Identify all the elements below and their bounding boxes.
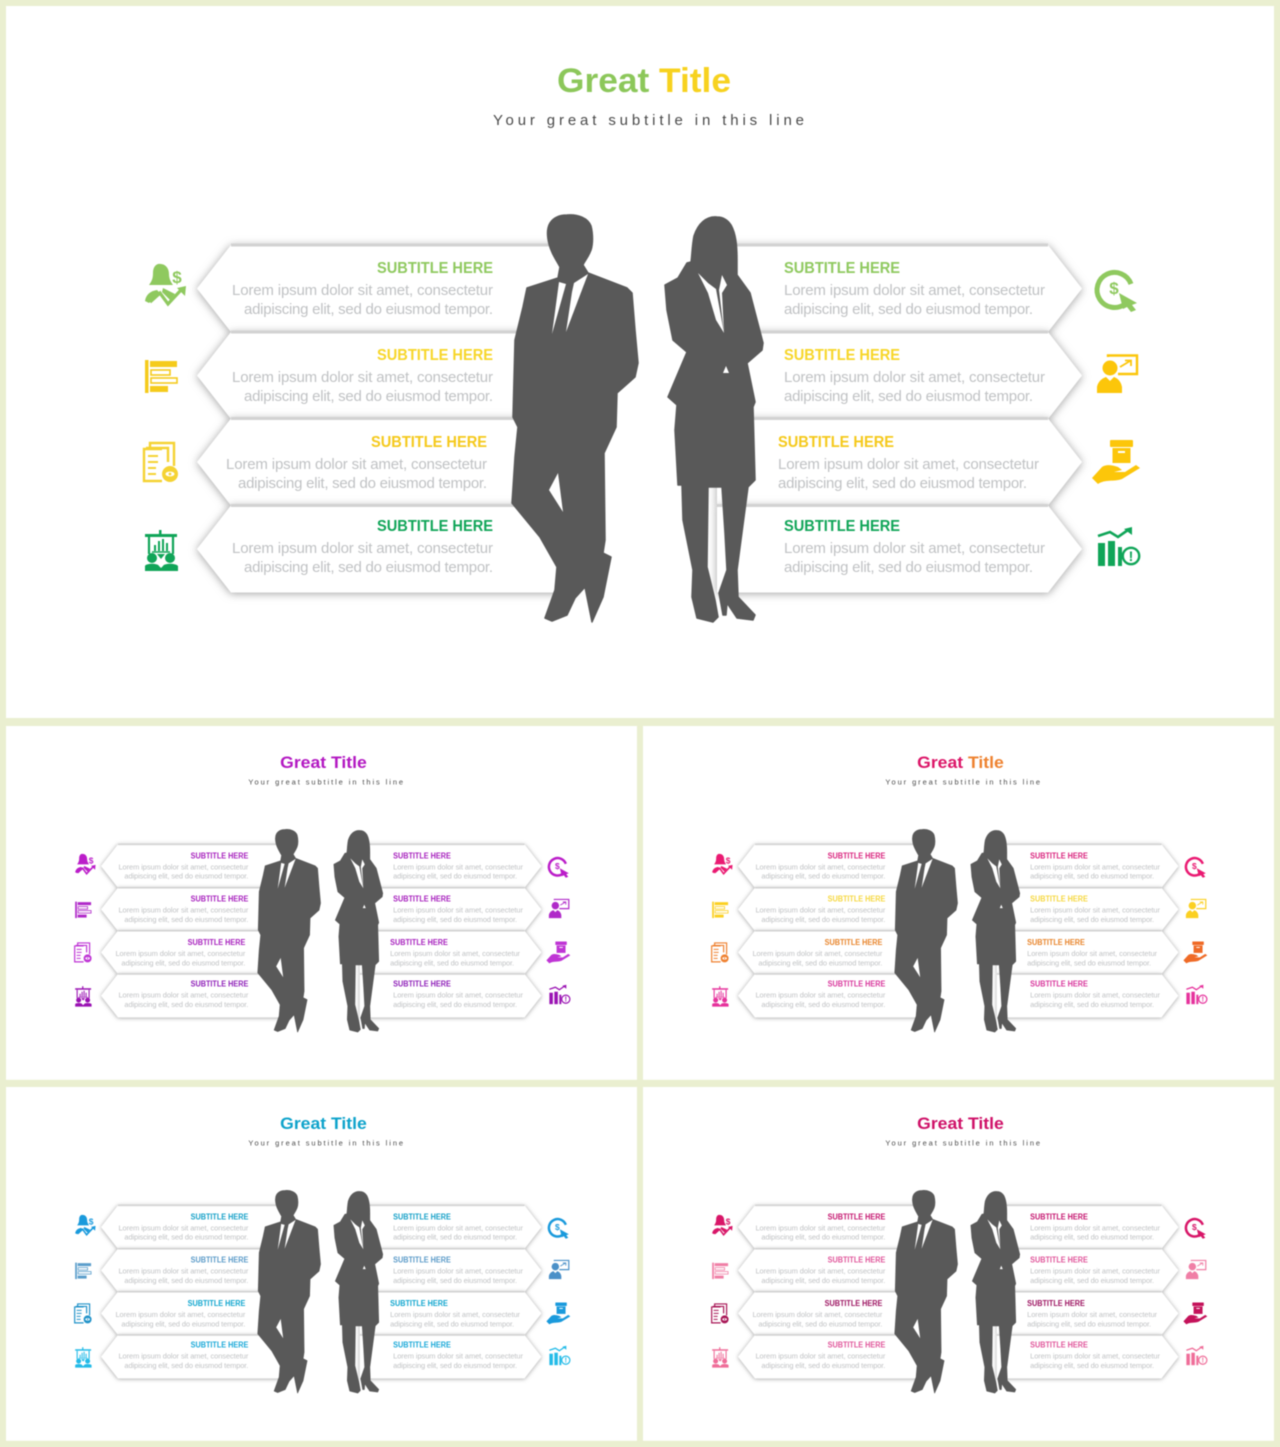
panel: left row 2: adipiscing elit, sed do eiusmod tempor.	[761, 1276, 885, 1285]
panel: right row 1: adipiscing elit, sed do eiusmod tempor.	[393, 872, 517, 881]
panel: left row 2: SUBTITLE HERE	[828, 895, 885, 904]
panel: right row 4: Lorem ipsum dolor sit amet, consectetur	[393, 1352, 524, 1361]
icon: person with rising chart	[75, 854, 96, 874]
panel: left row 4	[101, 974, 289, 1017]
panel: left row 3: SUBTITLE HERE	[371, 434, 487, 451]
panel: left row 1: Lorem ipsum dolor sit amet, consectetur	[118, 1223, 249, 1232]
icon: bars with alert: !	[565, 997, 567, 1004]
panel: left row 4	[101, 1335, 289, 1378]
panel: left row 1: SUBTITLE HERE	[191, 1212, 248, 1221]
title: Great Title	[917, 1114, 1004, 1133]
panel: right row 4	[997, 1335, 1178, 1378]
slide background	[643, 1087, 1274, 1441]
icon: presenter	[1186, 899, 1206, 918]
slide background	[643, 726, 1274, 1080]
panel: right row 1: adipiscing elit, sed do eiusmod tempor.	[784, 301, 1033, 318]
panel: right row 3: SUBTITLE HERE	[390, 1299, 448, 1308]
panel: right row 3	[717, 418, 1082, 506]
icon: dollar click: $	[555, 1222, 560, 1232]
icon: dollar click	[549, 858, 569, 878]
panel: right row 3: Lorem ipsum dolor sit amet, consectetur	[778, 456, 1039, 473]
icon: hand with box	[546, 941, 570, 963]
panel: right row 2	[360, 888, 541, 931]
panel: right row 1: SUBTITLE HERE	[393, 1212, 451, 1221]
icon: person with rising chart: $	[89, 855, 94, 865]
icon: bars with alert: !	[1129, 548, 1133, 564]
panel: right row 3: Lorem ipsum dolor sit amet, consectetur	[1027, 949, 1158, 958]
panel: right row 2: adipiscing elit, sed do eiusmod tempor.	[784, 388, 1033, 405]
panel: left row 4: SUBTITLE HERE	[828, 1341, 885, 1350]
panel: right row 4	[717, 506, 1082, 592]
panel: right row 3: adipiscing elit, sed do eiusmod tempor.	[1027, 1319, 1151, 1328]
panel: right row 1	[717, 245, 1082, 332]
panel: right row 3: adipiscing elit, sed do eiusmod tempor.	[778, 475, 1027, 492]
woman silhouette	[971, 1191, 1020, 1393]
panel: right row 1	[997, 844, 1178, 888]
icon: bar list	[75, 1263, 91, 1279]
icon: document with eye	[712, 943, 729, 962]
panel: right row 3: SUBTITLE HERE	[1027, 938, 1085, 947]
panel: right row 1: SUBTITLE HERE	[784, 260, 900, 277]
panel: right row 2: Lorem ipsum dolor sit amet, consectetur	[1030, 906, 1161, 915]
panel: left row 1: adipiscing elit, sed do eiusmod tempor.	[124, 1233, 248, 1242]
panel: left row 1: Lorem ipsum dolor sit amet, consectetur	[232, 282, 493, 299]
panel: right row 4: Lorem ipsum dolor sit amet, consectetur	[393, 991, 524, 1000]
slide background	[6, 6, 1274, 718]
icon: person with rising chart	[145, 264, 186, 304]
icon: person with rising chart: $	[726, 855, 731, 865]
icon: bars with alert: !	[1202, 997, 1204, 1004]
icon: bars with alert	[1098, 527, 1139, 566]
panel: left row 1: SUBTITLE HERE	[191, 851, 248, 860]
panel: right row 2: Lorem ipsum dolor sit amet, consectetur	[784, 369, 1045, 386]
icon: presentation board	[712, 1347, 729, 1368]
panel: right row 3: SUBTITLE HERE	[390, 938, 448, 947]
panel: right row 2: SUBTITLE HERE	[393, 1256, 451, 1265]
icon: document with eye	[712, 1304, 729, 1323]
panel: right row 1: SUBTITLE HERE	[1030, 851, 1088, 860]
icon: bars with alert	[1186, 985, 1207, 1004]
panel: right row 3: adipiscing elit, sed do eiusmod tempor.	[390, 958, 514, 967]
panel: right row 2	[717, 332, 1082, 419]
panel: left row 4: SUBTITLE HERE	[377, 518, 493, 535]
icon: person with rising chart	[712, 1215, 733, 1235]
panel: left row 2: adipiscing elit, sed do eiusmod tempor.	[761, 915, 885, 924]
panel: left row 2: Lorem ipsum dolor sit amet, consectetur	[232, 369, 493, 386]
woman silhouette	[665, 217, 763, 622]
icon: presenter	[1186, 1260, 1206, 1279]
panel: left row 3: Lorem ipsum dolor sit amet, consectetur	[115, 1310, 246, 1319]
panel: right row 2	[360, 1249, 541, 1292]
panel: right row 1: SUBTITLE HERE	[393, 851, 451, 860]
man silhouette	[258, 829, 320, 1032]
icon: bars with alert	[1186, 1346, 1207, 1365]
panel: left row 2	[101, 888, 289, 931]
title: Great Title	[280, 753, 367, 772]
icon: hand with box	[1092, 440, 1140, 484]
panel: left row 3	[101, 1292, 289, 1335]
icon: presentation board	[145, 530, 178, 571]
icon: dollar click	[1186, 1219, 1206, 1239]
panel: left row 2: Lorem ipsum dolor sit amet, consectetur	[118, 1267, 249, 1276]
icon: bars with alert: !	[565, 1358, 567, 1365]
panel: right row 4: SUBTITLE HERE	[393, 1341, 451, 1350]
panel: right row 4	[360, 1335, 541, 1378]
panel: right row 1	[360, 844, 541, 888]
panel: right row 2	[997, 888, 1178, 931]
panel: left row 3: Lorem ipsum dolor sit amet, consectetur	[226, 456, 487, 473]
panel: left row 1: Lorem ipsum dolor sit amet, consectetur	[755, 862, 886, 871]
panel: left row 4: Lorem ipsum dolor sit amet, consectetur	[755, 1352, 886, 1361]
panel: right row 2: adipiscing elit, sed do eiusmod tempor.	[1030, 1276, 1154, 1285]
title: Great Title	[917, 753, 1004, 772]
icon: dollar click: $	[1192, 861, 1197, 871]
icon: hand with box	[546, 1302, 570, 1324]
panel: left row 3: adipiscing elit, sed do eiusmod tempor.	[121, 958, 245, 967]
man silhouette	[512, 215, 638, 622]
subtitle: Your great subtitle in this line	[248, 1139, 403, 1148]
panel: right row 3: adipiscing elit, sed do eiusmod tempor.	[390, 1319, 514, 1328]
slide: magenta variant	[643, 1087, 1274, 1441]
panel: right row 3: Lorem ipsum dolor sit amet, consectetur	[390, 1310, 521, 1319]
title: Great Title	[280, 1114, 367, 1133]
panel: right row 3	[997, 1292, 1178, 1335]
panel: right row 4: SUBTITLE HERE	[393, 980, 451, 989]
icon: presentation board	[75, 986, 92, 1007]
icon: bar list	[75, 902, 91, 918]
icon: dollar click	[1186, 858, 1206, 878]
icon: dollar click: $	[555, 861, 560, 871]
man silhouette	[895, 829, 957, 1032]
woman silhouette	[334, 830, 383, 1032]
panel: right row 3: Lorem ipsum dolor sit amet, consectetur	[1027, 1310, 1158, 1319]
panel: right row 1: Lorem ipsum dolor sit amet, consectetur	[393, 862, 524, 871]
icon: presenter	[549, 1260, 569, 1279]
icon: person with rising chart: $	[172, 268, 182, 287]
icon: hand with box	[1183, 1302, 1207, 1324]
panel: left row 4: Lorem ipsum dolor sit amet, consectetur	[118, 1352, 249, 1361]
slide background	[6, 1087, 637, 1441]
icon: dollar click	[549, 1219, 569, 1239]
icon: presenter	[1097, 356, 1137, 393]
icon: document with eye	[75, 943, 92, 962]
panel: left row 2: SUBTITLE HERE	[377, 347, 493, 364]
man silhouette	[258, 1190, 320, 1393]
panel: left row 1	[197, 245, 575, 332]
subtitle: Your great subtitle in this line	[885, 1139, 1040, 1148]
panel: left row 3: adipiscing elit, sed do eiusmod tempor.	[758, 958, 882, 967]
panel: left row 1: Lorem ipsum dolor sit amet, consectetur	[118, 862, 249, 871]
panel: right row 2: adipiscing elit, sed do eiusmod tempor.	[393, 1276, 517, 1285]
panel: right row 3	[997, 931, 1178, 974]
panel: right row 1: Lorem ipsum dolor sit amet, consectetur	[393, 1223, 524, 1232]
panel: right row 4: adipiscing elit, sed do eiusmod tempor.	[784, 559, 1033, 576]
panel: left row 3: Lorem ipsum dolor sit amet, consectetur	[115, 949, 246, 958]
panel: left row 4	[197, 506, 575, 592]
icon: document with eye	[75, 1304, 92, 1323]
panel: right row 1: Lorem ipsum dolor sit amet, consectetur	[1030, 862, 1161, 871]
icon: person with rising chart: $	[726, 1216, 731, 1226]
panel: left row 2: SUBTITLE HERE	[191, 895, 248, 904]
woman silhouette	[971, 830, 1020, 1032]
panel: right row 1	[997, 1205, 1178, 1249]
panel: right row 4: SUBTITLE HERE	[1030, 1341, 1088, 1350]
panel: right row 2: SUBTITLE HERE	[784, 347, 900, 364]
subtitle: Your great subtitle in this line	[493, 112, 804, 129]
panel: right row 2: adipiscing elit, sed do eiusmod tempor.	[1030, 915, 1154, 924]
panel: left row 4: adipiscing elit, sed do eiusmod tempor.	[244, 559, 493, 576]
panel: left row 1	[738, 844, 926, 888]
panel: left row 4	[738, 974, 926, 1017]
panel: right row 4	[360, 974, 541, 1017]
panel: right row 2: adipiscing elit, sed do eiusmod tempor.	[393, 915, 517, 924]
panel: right row 4: adipiscing elit, sed do eiusmod tempor.	[1030, 1361, 1154, 1370]
panel: left row 2: Lorem ipsum dolor sit amet, consectetur	[755, 906, 886, 915]
panel: left row 2	[101, 1249, 289, 1292]
icon: dollar click: $	[1109, 279, 1119, 298]
panel: right row 4: SUBTITLE HERE	[1030, 980, 1088, 989]
panel: right row 4: adipiscing elit, sed do eiusmod tempor.	[393, 1361, 517, 1370]
panel: left row 3: adipiscing elit, sed do eiusmod tempor.	[121, 1319, 245, 1328]
title: Great Title	[557, 62, 731, 100]
panel: right row 1	[360, 1205, 541, 1249]
panel: left row 1	[101, 844, 289, 888]
icon: bars with alert	[549, 985, 570, 1004]
panel: left row 1	[738, 1205, 926, 1249]
panel: left row 2: SUBTITLE HERE	[191, 1256, 248, 1265]
icon: bar list	[712, 1263, 728, 1279]
panel: right row 1: adipiscing elit, sed do eiusmod tempor.	[393, 1233, 517, 1242]
panel: left row 3: SUBTITLE HERE	[825, 1299, 882, 1308]
panel: right row 1: adipiscing elit, sed do eiusmod tempor.	[1030, 872, 1154, 881]
panel: left row 4: Lorem ipsum dolor sit amet, consectetur	[755, 991, 886, 1000]
icon: bars with alert: !	[1202, 1358, 1204, 1365]
panel: right row 3: adipiscing elit, sed do eiusmod tempor.	[1027, 958, 1151, 967]
panel: left row 4: SUBTITLE HERE	[828, 980, 885, 989]
panel: left row 2: adipiscing elit, sed do eiusmod tempor.	[244, 388, 493, 405]
slide: main green and yellow	[6, 6, 1274, 718]
panel: right row 4: SUBTITLE HERE	[784, 518, 900, 535]
icon: person with rising chart	[75, 1215, 96, 1235]
panel: left row 3: SUBTITLE HERE	[188, 1299, 245, 1308]
panel: left row 2	[738, 888, 926, 931]
panel: left row 2: Lorem ipsum dolor sit amet, consectetur	[118, 906, 249, 915]
panel: left row 4: Lorem ipsum dolor sit amet, consectetur	[118, 991, 249, 1000]
panel: left row 1: adipiscing elit, sed do eiusmod tempor.	[124, 872, 248, 881]
panel: right row 2: SUBTITLE HERE	[1030, 1256, 1088, 1265]
panel: left row 3: Lorem ipsum dolor sit amet, consectetur	[752, 1310, 883, 1319]
panel: right row 2	[997, 1249, 1178, 1292]
panel: right row 3: SUBTITLE HERE	[1027, 1299, 1085, 1308]
panel: left row 3	[197, 418, 575, 506]
icon: bar list	[712, 902, 728, 918]
panel: left row 3: adipiscing elit, sed do eiusmod tempor.	[758, 1319, 882, 1328]
slide: pink and orange variant	[643, 726, 1274, 1080]
panel: right row 1: Lorem ipsum dolor sit amet, consectetur	[784, 282, 1045, 299]
panel: left row 2	[738, 1249, 926, 1292]
icon: bars with alert	[549, 1346, 570, 1365]
panel: right row 4: adipiscing elit, sed do eiusmod tempor.	[1030, 1000, 1154, 1009]
panel: left row 1: SUBTITLE HERE	[377, 260, 493, 277]
panel: left row 3	[101, 931, 289, 974]
panel: left row 1	[101, 1205, 289, 1249]
panel: right row 4: adipiscing elit, sed do eiusmod tempor.	[393, 1000, 517, 1009]
panel: right row 2: Lorem ipsum dolor sit amet, consectetur	[393, 1267, 524, 1276]
icon: person with rising chart	[712, 854, 733, 874]
panel: right row 1: Lorem ipsum dolor sit amet, consectetur	[1030, 1223, 1161, 1232]
panel: left row 4: SUBTITLE HERE	[191, 1341, 248, 1350]
panel: right row 2: Lorem ipsum dolor sit amet, consectetur	[1030, 1267, 1161, 1276]
panel: right row 4: Lorem ipsum dolor sit amet, consectetur	[1030, 1352, 1161, 1361]
subtitle: Your great subtitle in this line	[248, 778, 403, 787]
icon: person with rising chart: $	[89, 1216, 94, 1226]
panel: left row 4: adipiscing elit, sed do eiusmod tempor.	[761, 1000, 885, 1009]
panel: right row 1: adipiscing elit, sed do eiusmod tempor.	[1030, 1233, 1154, 1242]
panel: left row 4: SUBTITLE HERE	[191, 980, 248, 989]
panel: left row 3: SUBTITLE HERE	[188, 938, 245, 947]
panel: left row 4: adipiscing elit, sed do eiusmod tempor.	[124, 1361, 248, 1370]
panel: right row 4: Lorem ipsum dolor sit amet, consectetur	[1030, 991, 1161, 1000]
panel: left row 2: SUBTITLE HERE	[828, 1256, 885, 1265]
slide background	[6, 726, 637, 1080]
panel: right row 1: SUBTITLE HERE	[1030, 1212, 1088, 1221]
icon: presentation board	[712, 986, 729, 1007]
panel: left row 2: Lorem ipsum dolor sit amet, consectetur	[755, 1267, 886, 1276]
panel: left row 4: Lorem ipsum dolor sit amet, consectetur	[232, 540, 493, 557]
panel: right row 3	[360, 931, 541, 974]
panel: left row 3: adipiscing elit, sed do eiusmod tempor.	[238, 475, 487, 492]
panel: left row 2: adipiscing elit, sed do eiusmod tempor.	[124, 1276, 248, 1285]
panel: left row 1: Lorem ipsum dolor sit amet, consectetur	[755, 1223, 886, 1232]
panel: right row 2: SUBTITLE HERE	[393, 895, 451, 904]
icon: presentation board	[75, 1347, 92, 1368]
icon: hand with box	[1183, 941, 1207, 963]
panel: left row 1: SUBTITLE HERE	[828, 1212, 885, 1221]
panel: left row 1: adipiscing elit, sed do eiusmod tempor.	[244, 301, 493, 318]
panel: left row 4	[738, 1335, 926, 1378]
panel: right row 2: SUBTITLE HERE	[1030, 895, 1088, 904]
icon: bar list	[145, 360, 177, 393]
panel: right row 3: SUBTITLE HERE	[778, 434, 894, 451]
slide: blue variant	[6, 1087, 637, 1441]
icon: dollar click: $	[1192, 1222, 1197, 1232]
panel: left row 3: SUBTITLE HERE	[825, 938, 882, 947]
panel: right row 2: Lorem ipsum dolor sit amet, consectetur	[393, 906, 524, 915]
panel: left row 3	[738, 931, 926, 974]
woman silhouette	[334, 1191, 383, 1393]
icon: dollar click	[1097, 272, 1137, 312]
panel: right row 3: Lorem ipsum dolor sit amet, consectetur	[390, 949, 521, 958]
panel: left row 1: adipiscing elit, sed do eiusmod tempor.	[761, 1233, 885, 1242]
man silhouette	[895, 1190, 957, 1393]
panel: right row 4: Lorem ipsum dolor sit amet, consectetur	[784, 540, 1045, 557]
panel: left row 1: adipiscing elit, sed do eiusmod tempor.	[761, 872, 885, 881]
slide: purple variant	[6, 726, 637, 1080]
panel: right row 4	[997, 974, 1178, 1017]
panel: left row 4: adipiscing elit, sed do eiusmod tempor.	[761, 1361, 885, 1370]
panel: left row 4: adipiscing elit, sed do eiusmod tempor.	[124, 1000, 248, 1009]
subtitle: Your great subtitle in this line	[885, 778, 1040, 787]
icon: presenter	[549, 899, 569, 918]
panel: left row 2: adipiscing elit, sed do eiusmod tempor.	[124, 915, 248, 924]
panel: left row 3	[738, 1292, 926, 1335]
panel: right row 3	[360, 1292, 541, 1335]
icon: document with eye	[144, 443, 178, 482]
panel: left row 3: Lorem ipsum dolor sit amet, consectetur	[752, 949, 883, 958]
panel: left row 1: SUBTITLE HERE	[828, 851, 885, 860]
panel: left row 2	[197, 332, 575, 419]
